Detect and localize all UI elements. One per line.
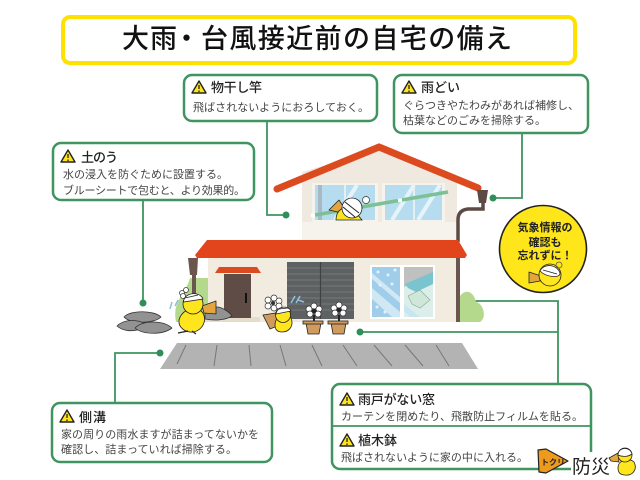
callout: 雨どい: 雨どい [421, 80, 460, 95]
callout: 雨戸がない窓 and 植木鉢: 飛ばされないように家の中に入れる。 [341, 450, 528, 464]
callout: 土のう: 水の浸入を防ぐために設置する。 [63, 167, 228, 181]
callout: 側溝: 確認し、詰まっていれば掃除する。 [61, 442, 237, 456]
connector: 土のう [140, 200, 146, 306]
title: ・ [173, 24, 200, 54]
connector: 植木鉢 [356, 328, 558, 336]
upper chick [329, 196, 370, 220]
logo: トクリ [541, 457, 565, 467]
callout: 雨戸がない窓 and 植木鉢: 植木鉢 [358, 433, 397, 448]
bushes [175, 278, 484, 322]
callout: 側溝 [52, 403, 272, 462]
upper floor [302, 149, 457, 241]
house [175, 147, 488, 322]
callout: 物干し竿 [184, 75, 377, 121]
door [215, 267, 261, 318]
callout: 土のう: ブルーシートで包むと、より効果的。 [63, 183, 245, 197]
warning icon [340, 434, 354, 446]
title: 台風接近前の自宅の備え [201, 24, 512, 54]
callout: 雨戸がない窓 and 植木鉢: 雨戸がない窓 [358, 392, 435, 407]
logo [538, 448, 635, 478]
warning icon [402, 81, 416, 93]
flower pots [303, 302, 348, 334]
shutter [287, 262, 354, 319]
warning icon [60, 410, 74, 422]
side ditch road [160, 343, 478, 369]
callout: 雨どい: ぐらつきやたわみがあれば補修し、 [403, 98, 579, 112]
sandbags [117, 307, 232, 333]
connector: 側溝 [115, 350, 164, 402]
down pipes [188, 258, 460, 322]
upper windows [312, 183, 445, 222]
ground floor wall [208, 256, 456, 322]
callout: 土のう: 土のう [81, 150, 118, 165]
callout: 物干し竿: 飛ばされないようにおろしておく。 [193, 101, 369, 114]
title: 大雨 [122, 24, 177, 54]
callout: 側溝: 家の周りの雨水ますが詰まってないかを [61, 427, 259, 441]
callout: 気象情報 [500, 206, 586, 292]
callout: 雨どい [394, 75, 588, 133]
callout: 雨どい: 枯葉などのごみを掃除する。 [403, 113, 546, 127]
callout: 雨戸がない窓 and 植木鉢: カーテンを閉めたり、飛散防止フィルムを貼る。 [341, 409, 583, 423]
gutter [458, 190, 488, 242]
lower roof [195, 240, 467, 258]
callout: 気象情報: 忘れずに！ [518, 248, 572, 262]
mascot [529, 262, 562, 286]
callout: 気象情報: 気象情報の [518, 220, 572, 234]
chick carrying plant [263, 295, 292, 332]
connector: 雨どい [490, 133, 522, 202]
warning icon [192, 81, 206, 93]
warning icon [61, 150, 75, 162]
laundry pole [315, 192, 448, 215]
ground window [370, 265, 435, 319]
title [63, 17, 575, 63]
logo: 防災 [572, 456, 610, 478]
connector: 物干し竿 [267, 121, 290, 218]
main roof [277, 147, 478, 189]
connector: 雨戸がない窓 [438, 298, 558, 383]
chick carrying sandbag [170, 288, 216, 334]
callout: 気象情報: 確認も [528, 235, 562, 249]
warning icon [340, 393, 354, 405]
callout: 雨戸がない窓 and 植木鉢 [332, 384, 591, 469]
callout: 側溝: 側溝 [79, 410, 106, 425]
callout: 物干し竿: 物干し竿 [211, 80, 262, 95]
callout: 土のう [53, 143, 254, 200]
